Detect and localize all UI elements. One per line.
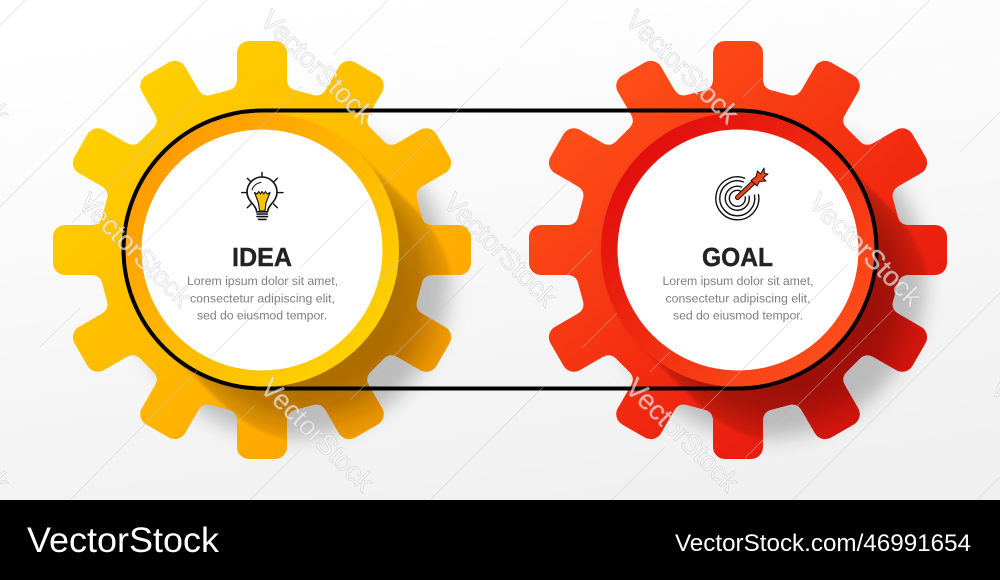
watermark texts: VectorStock	[73, 187, 198, 313]
icon: light bulb	[242, 172, 283, 219]
gear drop shadow: goal	[606, 118, 926, 438]
text block: goal description: sed do eiusmod tempor.	[673, 308, 803, 322]
text block: goal description	[662, 274, 814, 322]
gear drop shadow: idea	[130, 118, 450, 438]
footer image id: VectorStock.com/46991654	[675, 530, 971, 557]
inner white circle	[142, 130, 382, 370]
watermark texts: VectorStock	[803, 187, 928, 313]
black rounded connector belt	[124, 110, 876, 388]
icon: target with arrow	[716, 168, 768, 220]
text block: idea description: consectetur adipiscing elit,	[190, 291, 335, 305]
watermark texts: VectorStock	[255, 4, 380, 130]
heading: IDEA: IDEA	[232, 242, 292, 272]
panel: goal gear	[523, 35, 953, 465]
text block: idea description	[187, 274, 338, 322]
heading: GOAL: GOAL	[702, 242, 773, 272]
watermark texts: VectorStock	[620, 4, 745, 130]
text block: goal description: consectetur adipiscing elit,	[666, 291, 810, 305]
ring: red	[601, 113, 875, 387]
footer bar	[0, 500, 1000, 580]
text block: idea description: Lorem ipsum dolor sit amet,	[187, 274, 338, 288]
gear shape: red	[523, 35, 953, 465]
watermark texts: VectorStock	[438, 187, 563, 313]
inner white circle	[618, 130, 858, 370]
footer logo text: VectorStock	[27, 520, 219, 560]
text block: goal description: Lorem ipsum dolor sit amet,	[662, 274, 814, 288]
text block: idea description: sed do eiusmod tempor.	[197, 308, 327, 322]
ring: yellow	[125, 113, 399, 387]
watermark texts: VectorStock	[255, 372, 380, 498]
panel: idea gear	[47, 35, 477, 465]
gear shape: yellow	[47, 35, 477, 465]
watermark texts: VectorStock	[620, 372, 745, 498]
